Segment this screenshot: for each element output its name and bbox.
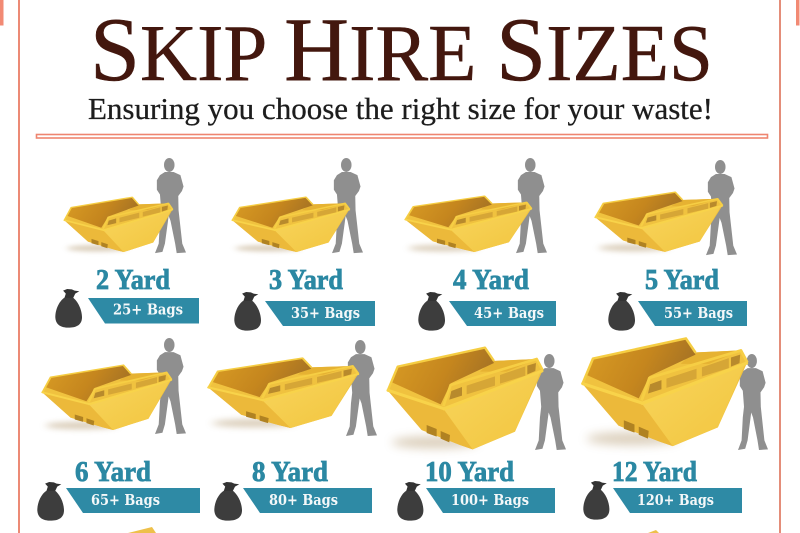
- person silhouette: [332, 158, 363, 253]
- left corner tab: [0, 0, 4, 26]
- size label: 3 Yard: [269, 265, 343, 296]
- bag count: 120+ Bags: [637, 491, 714, 509]
- card: 8 Yard: [208, 340, 377, 521]
- size label: 5 Yard: [645, 265, 719, 296]
- bag icon: [37, 482, 64, 521]
- card: 2 Yard: [55, 158, 199, 328]
- bag ribbon: [426, 488, 555, 513]
- subtitle: Ensuring you choose the right size for your waste!: [88, 92, 713, 126]
- next row skip edge, left: [128, 527, 156, 533]
- bag ribbon: [88, 298, 199, 324]
- skip: [595, 192, 722, 252]
- bag count: 65+ Bags: [91, 491, 160, 509]
- size label: 8 Yard: [252, 457, 328, 488]
- card: 10 Yard: [387, 348, 566, 521]
- bag ribbon: [243, 488, 372, 513]
- card: 12 Yard: [582, 338, 768, 520]
- bag count: 100+ Bags: [451, 491, 529, 509]
- bag icon: [397, 482, 423, 521]
- person silhouette: [738, 354, 768, 450]
- bag count: 25+ Bags: [113, 300, 183, 318]
- person silhouette: [155, 158, 186, 253]
- card: 3 Yard: [232, 158, 375, 331]
- bag icon: [214, 482, 242, 521]
- bag icon: [608, 292, 635, 331]
- bag ribbon: [66, 488, 200, 513]
- bag icon: [418, 292, 445, 331]
- bag icon: [234, 292, 261, 331]
- bag ribbon: [638, 301, 747, 326]
- card: 4 Yard: [405, 158, 556, 331]
- person silhouette: [155, 338, 186, 434]
- bag count: 55+ Bags: [664, 304, 733, 322]
- left frame line: [18, 0, 20, 533]
- skip: [405, 196, 531, 252]
- bag ribbon: [613, 488, 742, 513]
- skip: [232, 197, 349, 252]
- skip: [64, 197, 173, 252]
- double rule: [36, 134, 768, 138]
- size label: 4 Yard: [453, 265, 529, 296]
- skip: [387, 348, 543, 449]
- bag ribbon: [265, 301, 375, 326]
- title: SKIP HIRE SIZES: [90, 0, 713, 100]
- size label: 2 Yard: [96, 265, 170, 296]
- card: 5 Yard: [595, 160, 747, 331]
- bag count: 80+ Bags: [269, 491, 338, 509]
- size label: 10 Yard: [425, 457, 514, 488]
- skip: [208, 358, 358, 428]
- card: 6 Yard: [37, 338, 200, 521]
- right corner tab: [796, 0, 800, 26]
- bag icon: [55, 289, 82, 328]
- right frame line: [779, 0, 781, 533]
- skip: [582, 338, 747, 446]
- person silhouette: [706, 160, 737, 255]
- skip: [42, 365, 171, 430]
- bag count: 45+ Bags: [474, 304, 544, 322]
- size label: 6 Yard: [75, 457, 151, 488]
- size label: 12 Yard: [612, 457, 697, 488]
- person silhouette: [346, 340, 377, 436]
- bag count: 35+ Bags: [291, 304, 360, 322]
- next row skip edge, right: [648, 530, 659, 533]
- person silhouette: [535, 354, 566, 450]
- bag ribbon: [449, 301, 556, 326]
- bag icon: [583, 481, 609, 520]
- person silhouette: [516, 158, 547, 253]
